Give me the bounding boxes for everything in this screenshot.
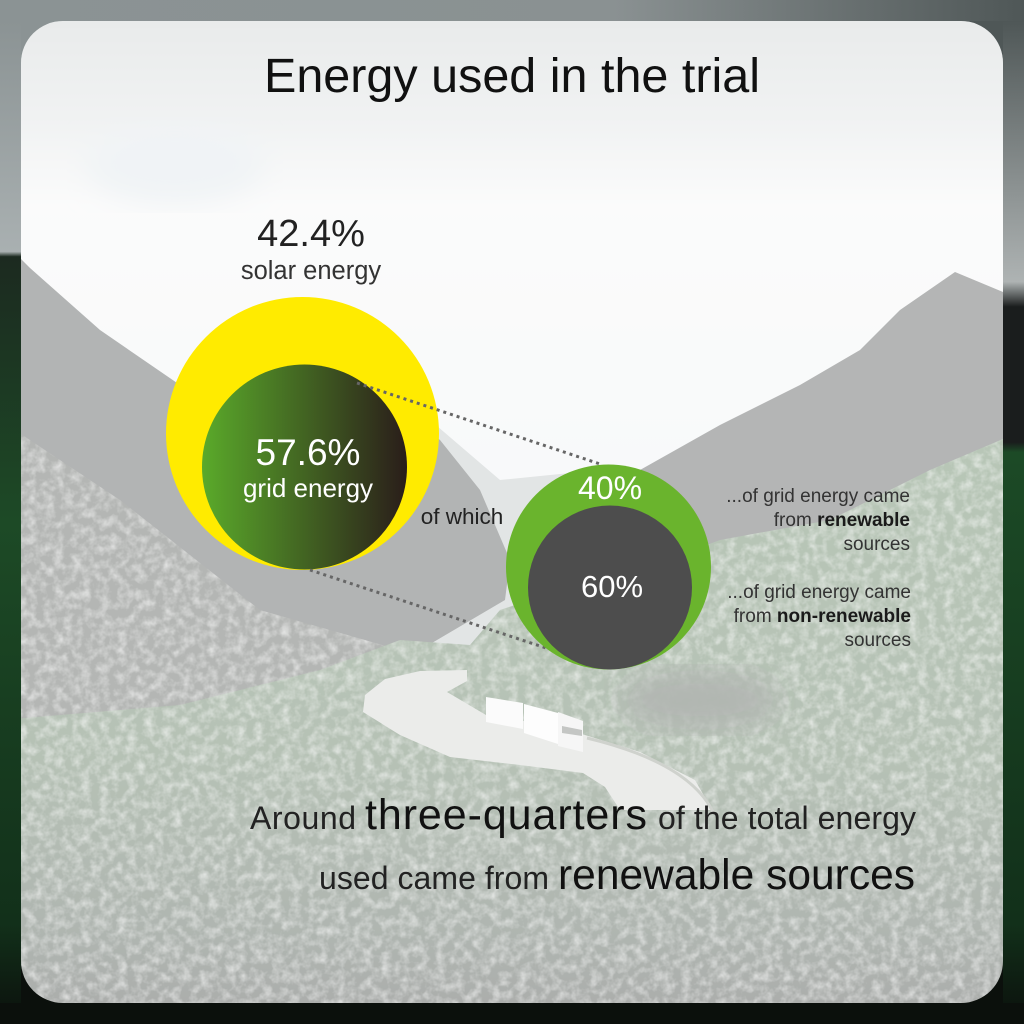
text: renewable grid energy: sources: [843, 534, 910, 555]
chart: solar and grid energy circles: grid energy: [243, 473, 373, 503]
connector: dotted lines between circles: [310, 383, 600, 648]
title: Energy used in the trial: [264, 49, 760, 103]
solar energy label: [241, 213, 381, 285]
text: non-renewable grid energy: ...of grid energy came: [727, 582, 911, 603]
text: non-renewable grid energy: sources: [844, 630, 911, 651]
text: non-renewable grid energy: from non-renewable: [734, 606, 911, 627]
chart: renewable and non-renewable grid circles: 60%: [581, 569, 643, 604]
solar energy label: 42.4%: [257, 213, 365, 255]
text: non-renewable grid energy: [727, 582, 911, 651]
of which label: of which: [421, 504, 503, 529]
chart: renewable and non-renewable grid circles: 40%: [578, 470, 642, 506]
text: renewable grid energy: [726, 486, 910, 555]
conclusion text: Around: [250, 800, 356, 836]
text: renewable grid energy: from renewable: [774, 510, 910, 531]
conclusion text: renewable sources: [558, 852, 915, 899]
conclusion text: [250, 791, 916, 899]
conclusion text: used came from: [319, 860, 549, 896]
road and truck: [363, 670, 713, 812]
conclusion text: of the total energy: [658, 800, 916, 836]
text: renewable grid energy: ...of grid energy came: [726, 486, 910, 507]
solar energy label: solar energy: [241, 257, 381, 285]
chart: solar and grid energy circles: 57.6%: [256, 432, 360, 473]
conclusion text: three-quarters: [365, 791, 647, 839]
chart: renewable and non-renewable grid circles: [506, 464, 711, 670]
chart: solar and grid energy circles: [166, 297, 439, 570]
